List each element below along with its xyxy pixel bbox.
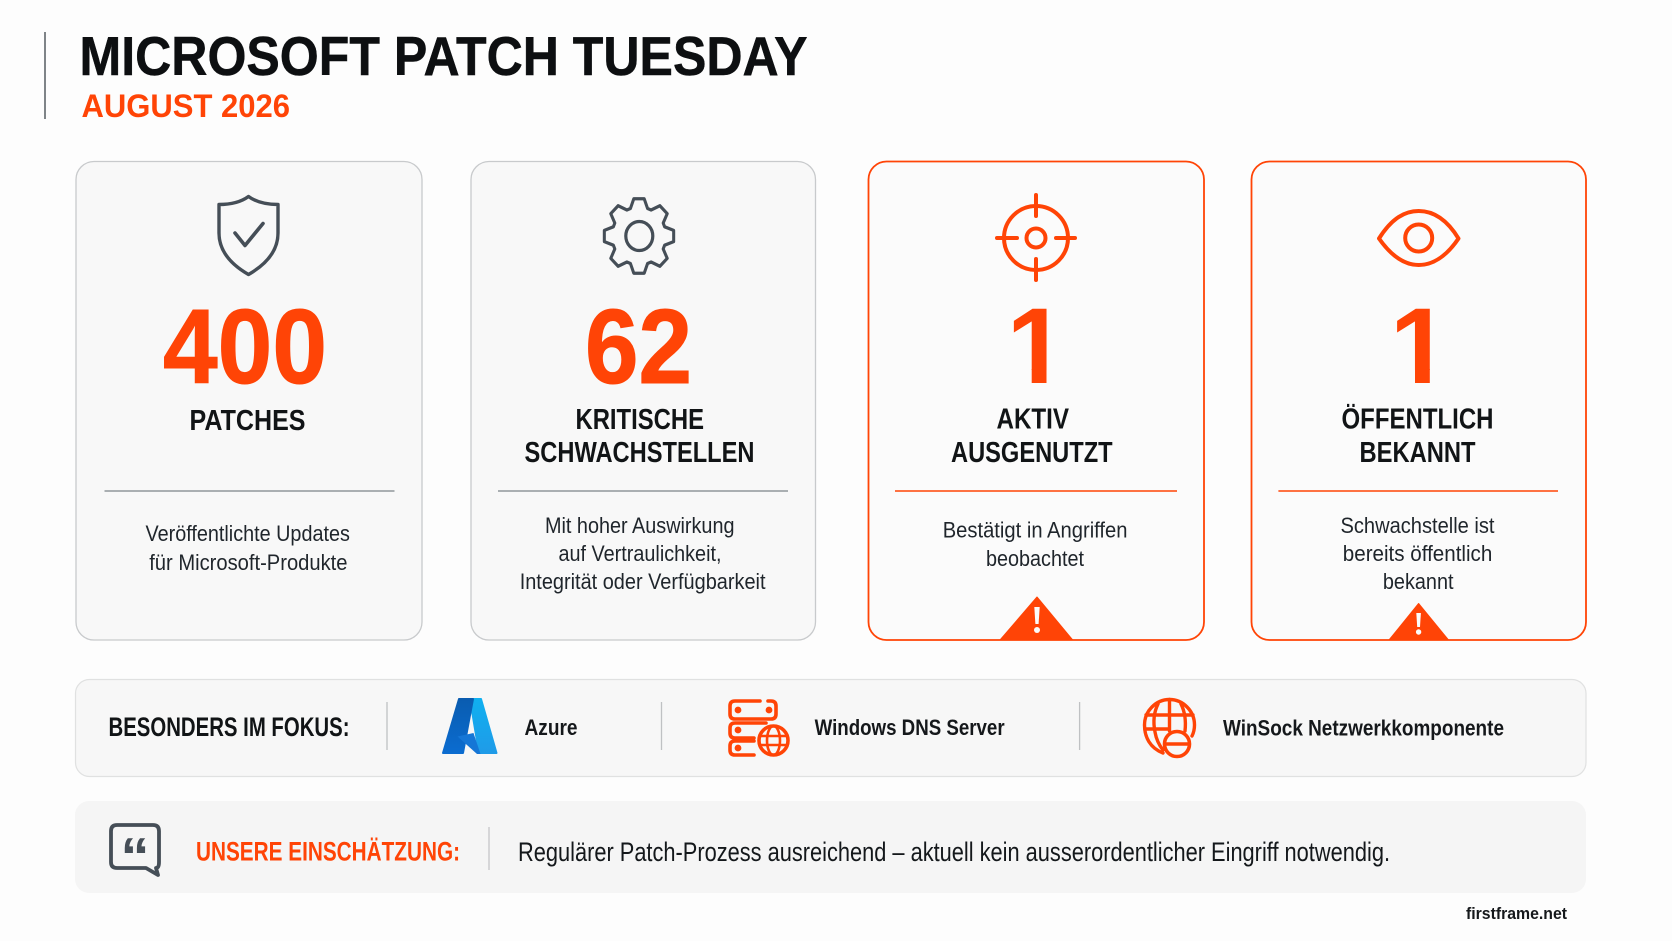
icon: quote bubble bbox=[111, 825, 159, 886]
icon: network globe bbox=[1144, 700, 1194, 756]
label: winsock: WinSock Netzwerkkomponente bbox=[1223, 716, 1504, 740]
panel: publicly known bbox=[1252, 162, 1586, 640]
description: auf Vertraulichkeit, bbox=[558, 541, 722, 566]
label bbox=[524, 404, 754, 469]
description bbox=[943, 518, 1128, 571]
panel: critical bbox=[471, 162, 816, 640]
number: 1 bbox=[1390, 285, 1450, 406]
number: 400 bbox=[163, 288, 327, 406]
description bbox=[1340, 513, 1495, 594]
header bbox=[45, 26, 808, 124]
icon: warning triangle bbox=[1389, 604, 1448, 640]
label: PATCHES bbox=[190, 405, 306, 437]
description: Veröffentlichte Updates bbox=[146, 521, 350, 546]
description: Integrität oder Verfügbarkeit bbox=[520, 569, 766, 594]
icon: dns server bbox=[730, 701, 788, 755]
label: dns: Windows DNS Server bbox=[815, 715, 1005, 740]
description: Mit hoher Auswirkung bbox=[545, 513, 734, 538]
icon: azure logo bbox=[443, 699, 496, 754]
description bbox=[520, 513, 766, 594]
icon: warning triangle bbox=[1000, 597, 1073, 640]
label: ÖFFENTLICH bbox=[1342, 403, 1494, 436]
panel: actively exploited bbox=[868, 162, 1204, 640]
footer: source: firstframe.net bbox=[1466, 904, 1567, 923]
panel: focus bbox=[76, 680, 1586, 776]
subtitle: AUGUST 2026 bbox=[82, 88, 290, 124]
label: SCHWACHSTELLEN bbox=[524, 437, 754, 469]
description: bekannt bbox=[1383, 569, 1454, 594]
icon: gear bbox=[604, 199, 674, 273]
label bbox=[1342, 403, 1494, 469]
description: Schwachstelle ist bbox=[1340, 513, 1495, 538]
label: AKTIV bbox=[996, 404, 1070, 436]
number bbox=[1014, 308, 1047, 383]
label: KRITISCHE bbox=[576, 404, 704, 436]
title: MICROSOFT PATCH TUESDAY bbox=[80, 26, 808, 87]
description: beobachtet bbox=[986, 546, 1085, 571]
icon: quote bubble: “ bbox=[120, 828, 150, 886]
assessment text: Regulärer Patch-Prozess ausreichend – aktuell kein ausserordentlicher Eingriff notwendig. bbox=[518, 837, 1390, 867]
description: für Microsoft-Produkte bbox=[149, 550, 348, 575]
description bbox=[146, 521, 350, 575]
panel: patches bbox=[76, 162, 422, 640]
label: AUSGENUTZT bbox=[951, 437, 1113, 469]
number: 62 bbox=[585, 288, 692, 406]
label bbox=[951, 404, 1113, 469]
icon: eye bbox=[1379, 211, 1458, 265]
focus heading: BESONDERS IM FOKUS: bbox=[108, 712, 350, 742]
icon: shield check bbox=[219, 196, 278, 274]
description: bereits öffentlich bbox=[1343, 541, 1492, 566]
description: Bestätigt in Angriffen bbox=[943, 518, 1128, 543]
panel: assessment bbox=[75, 801, 1586, 893]
icon: target bbox=[997, 195, 1075, 280]
label: azure: Azure bbox=[524, 715, 578, 740]
label: BEKANNT bbox=[1360, 437, 1476, 469]
number: 1 bbox=[1006, 285, 1067, 406]
number bbox=[1397, 308, 1430, 383]
assessment heading: UNSERE EINSCHÄTZUNG: bbox=[196, 836, 460, 866]
